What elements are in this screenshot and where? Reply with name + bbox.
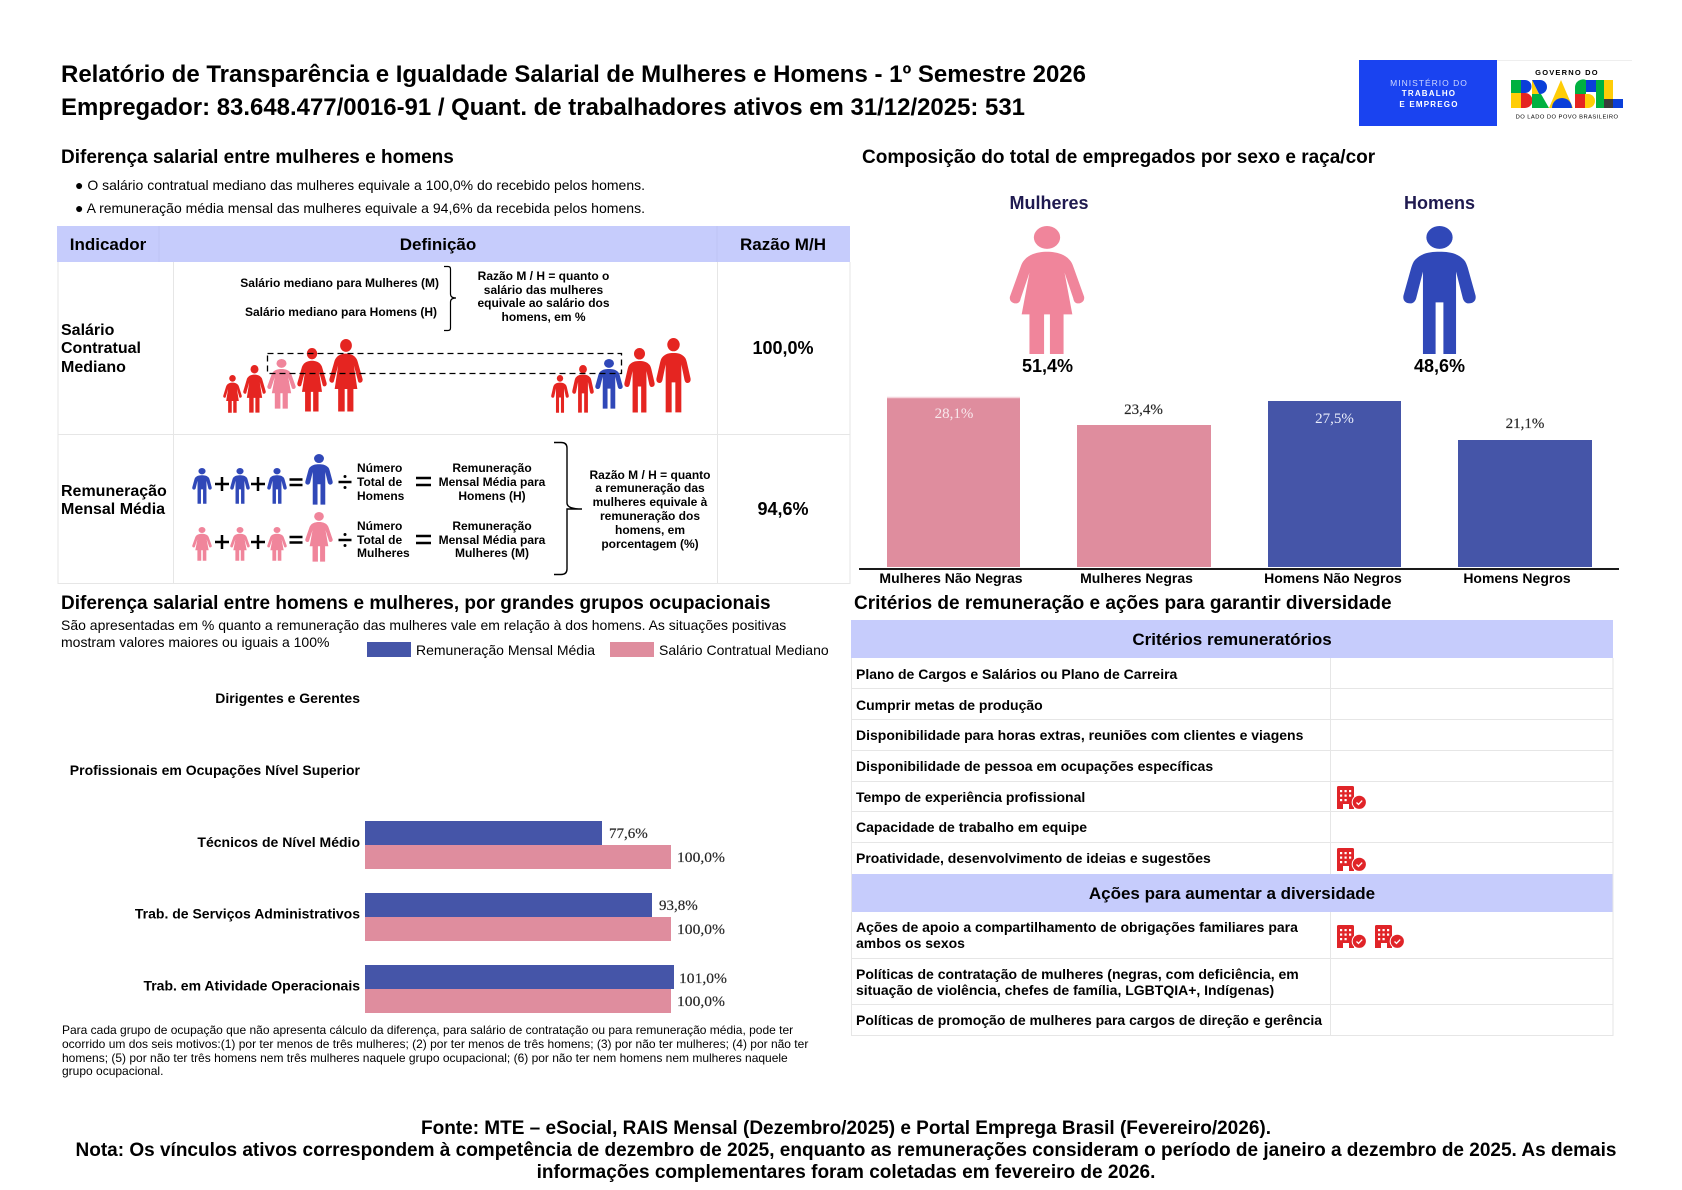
formula: women: Total de	[357, 533, 402, 547]
bar labels: Mulheres Não Negras	[879, 570, 1023, 586]
panel: definition table	[57, 226, 850, 584]
formula: women: Remuneração	[452, 519, 532, 533]
formula: women	[192, 512, 546, 562]
panel: men composition: 48,6%	[1414, 356, 1465, 376]
bar values: 28,1%	[935, 406, 973, 422]
bar values: 93,8%	[659, 898, 698, 914]
actions labels	[856, 919, 1322, 1028]
panel: women composition: 51,4%	[1022, 356, 1073, 376]
footnote: ocorrido um dos seis motivos:(1) por ter menos de três mulheres; (2) por ter menos de três homens; (3) por não ter mulheres; (4) por não ter	[62, 1037, 808, 1051]
formula: women: Mensal Média para	[439, 533, 546, 547]
row label: salário contratual mediano: Contratual	[61, 340, 141, 357]
footnote: homens; (5) por não ter três homens nem três mulheres naquele grupo ocupacional; (6) por não ter nem homens nem mulheres naquele	[62, 1051, 788, 1065]
source note: Nota: Os vínculos ativos correspondem à competência de dezembro de 2025, enquanto as remunerações consideram o período de janeiro a dezembro de 2025. As demais	[76, 1140, 1616, 1161]
heading: composição: Composição do total de empregados por sexo e raça/cor	[862, 147, 1376, 168]
formula: women: Mulheres	[357, 546, 410, 560]
icon: company check, family	[1337, 925, 1367, 949]
panel: men composition	[1403, 193, 1476, 376]
median dashed box	[268, 354, 622, 374]
bar values: 77,6%	[609, 826, 648, 842]
definition: median salary labels: Salário mediano para Mulheres (M)	[240, 276, 439, 290]
category labels: Trab. de Serviços Administrativos	[135, 906, 360, 922]
bar labels	[879, 570, 1571, 586]
subtitle text: mostram valores maiores ou iguais a 100%	[61, 634, 329, 650]
panel: criteria table	[851, 620, 1613, 1036]
definition: median salary labels	[240, 276, 439, 319]
heading: critérios: Critérios de remuneração e ações para garantir diversidade	[854, 593, 1392, 614]
heading: diferença salarial: Diferença salarial entre mulheres e homens	[61, 147, 454, 168]
definition: ratio text row 2: mulheres equivale à	[593, 495, 708, 509]
footnote: grupo ocupacional.	[62, 1064, 163, 1078]
category labels: Profissionais em Ocupações Nível Superior	[70, 762, 361, 778]
definition: ratio text: Razão M / H = quanto o	[478, 269, 609, 283]
logo: Ministério do Trabalho e Emprego: MINISTÉRIO DO	[1390, 78, 1468, 88]
panel: women composition: Mulheres	[1009, 193, 1089, 213]
icon: large brace	[554, 442, 582, 574]
title	[61, 61, 1086, 121]
footnote: Para cada grupo de ocupação que não apresenta cálculo da diferença, para salário de contratação ou para remuneração média, pode ter	[62, 1023, 793, 1037]
definition: ratio text: homens, em %	[501, 310, 586, 324]
icon: row of women	[223, 339, 363, 413]
formula: women: Número	[357, 519, 402, 533]
row label: salário contratual mediano	[61, 322, 141, 376]
bullet text: ● O salário contratual mediano das mulheres equivale a 100,0% do recebido pelos homens.	[75, 177, 645, 193]
formula: men: Remuneração	[452, 461, 532, 475]
definition: ratio text row 2: homens, em	[615, 523, 685, 537]
actions labels: situação de violência, chefes de família, LGBTQIA+, Indígenas)	[856, 982, 1274, 998]
row label: remuneração mensal média: Remuneração	[61, 483, 167, 500]
legend	[367, 642, 829, 658]
bar labels: Homens Não Negros	[1264, 570, 1402, 586]
definition: ratio text row 2: porcentagem (%)	[601, 537, 699, 551]
icon: company check, family second	[1375, 925, 1405, 949]
criteria labels	[856, 666, 1304, 866]
criteria labels: Tempo de experiência profissional	[856, 789, 1085, 805]
bullet text: ● A remuneração média mensal das mulheres equivale a 94,6% da recebida pelos homens.	[75, 200, 645, 216]
legend: Remuneração Mensal Média	[416, 642, 595, 658]
definition: ratio text row 2	[589, 468, 711, 551]
table header labels: Razão M/H	[740, 235, 826, 254]
actions labels: Políticas de promoção de mulheres para cargos de direção e gerência	[856, 1012, 1322, 1028]
formula: men: Total de	[357, 475, 402, 489]
subtitle text: São apresentadas em % quanto a remuneração das mulheres vale em relação à dos homens. As situações positivas	[61, 617, 786, 633]
definition: ratio text: salário das mulheres	[484, 283, 604, 297]
title: Relatório de Transparência e Igualdade Salarial de Mulheres e Homens - 1º Semestre 2026	[61, 61, 1086, 88]
bar chart: occupational groups	[70, 690, 727, 1013]
subtitle text	[61, 617, 786, 650]
criteria labels: Cumprir metas de produção	[856, 697, 1043, 713]
section header: ações: Ações para aumentar a diversidade	[1089, 884, 1375, 903]
formula: men	[192, 454, 546, 505]
bar labels: Homens Negros	[1463, 570, 1571, 586]
logo: Ministério do Trabalho e Emprego: E EMPREGO	[1399, 100, 1459, 109]
source note	[76, 1118, 1616, 1183]
panel: women composition	[1009, 193, 1089, 376]
criteria labels: Disponibilidade para horas extras, reuniões com clientes e viagens	[856, 727, 1304, 743]
bar values: 21,1%	[1506, 416, 1544, 432]
formula: men: Mensal Média para	[439, 475, 546, 489]
icon: company check, proactivity	[1337, 848, 1367, 872]
definition: ratio text row 2: a remuneração das	[595, 481, 705, 495]
title: Empregador: 83.648.477/0016-91 / Quant. de trabalhadores ativos em 31/12/2025: 531	[61, 94, 1025, 121]
bar values	[935, 402, 1544, 432]
heading: grupos ocupacionais: Diferença salarial entre homens e mulheres, por grandes grupos ocupacionais	[61, 593, 771, 614]
bar chart: sexo e raça	[859, 397, 1619, 586]
definition: ratio text row 2: remuneração dos	[600, 509, 700, 523]
icon: row of men	[551, 338, 691, 413]
definition: ratio text	[477, 269, 610, 324]
bar values: 100,0%	[677, 922, 725, 938]
footnote	[62, 1023, 808, 1078]
panel: men composition: Homens	[1404, 193, 1475, 213]
definition: ratio text: equivale ao salário dos	[477, 296, 610, 310]
table header labels: Indicador	[70, 235, 147, 254]
formula: women: Mulheres (M)	[455, 546, 529, 560]
value: 100,0%: 100,0%	[752, 338, 814, 358]
legend: Salário Contratual Mediano	[659, 642, 829, 658]
table header labels	[70, 235, 826, 254]
category labels: Trab. em Atividade Operacionais	[143, 978, 360, 994]
formula: men: Homens (H)	[458, 489, 526, 503]
source note: Fonte: MTE – eSocial, RAIS Mensal (Dezembro/2025) e Portal Emprega Brasil (Fevereiro/2026).	[421, 1118, 1271, 1139]
row label: remuneração mensal média: Mensal Média	[61, 501, 165, 518]
bar values: 100,0%	[677, 994, 725, 1010]
definition: ratio text row 2: Razão M / H = quanto	[589, 468, 711, 482]
criteria labels: Proatividade, desenvolvimento de ideias e sugestões	[856, 850, 1211, 866]
bar values: 27,5%	[1315, 411, 1354, 427]
source note: informações complementares foram coletadas em fevereiro de 2026.	[537, 1162, 1155, 1183]
logo: Governo do Brasil: DO LADO DO POVO BRASILEIRO	[1516, 114, 1618, 120]
actions labels: ambos os sexos	[856, 935, 965, 951]
category labels: Técnicos de Nível Médio	[197, 834, 360, 850]
section header: critérios remuneratórios: Critérios remuneratórios	[1132, 630, 1332, 649]
row label: salário contratual mediano: Salário	[61, 322, 115, 339]
bar values	[609, 826, 727, 1010]
criteria labels: Capacidade de trabalho em equipe	[856, 819, 1087, 835]
criteria labels: Disponibilidade de pessoa em ocupações específicas	[856, 758, 1213, 774]
definition: median salary labels: Salário mediano para Homens (H)	[245, 305, 437, 319]
bar values: 101,0%	[679, 971, 727, 987]
icon: brace	[444, 266, 456, 330]
logo: Governo do Brasil: GOVERNO DO	[1535, 68, 1599, 77]
logo: Ministério do Trabalho e Emprego: TRABALHO	[1402, 89, 1456, 98]
actions labels: Ações de apoio a compartilhamento de obrigações familiares para	[856, 919, 1298, 935]
category labels: Dirigentes e Gerentes	[215, 690, 360, 706]
table header labels: Definição	[400, 235, 476, 254]
icon: company check, experience	[1337, 786, 1367, 810]
value: 94,6%: 94,6%	[757, 499, 809, 519]
bullet text	[75, 177, 645, 216]
formula: men: Homens	[357, 489, 405, 503]
bar values: 100,0%	[677, 850, 725, 866]
bar values: 23,4%	[1124, 402, 1163, 418]
logo: Governo do Brasil	[1497, 60, 1632, 126]
logo: Ministério do Trabalho e Emprego	[1359, 60, 1497, 126]
row label: salário contratual mediano: Mediano	[61, 359, 126, 376]
formula: men: Número	[357, 461, 402, 475]
bar labels: Mulheres Negras	[1080, 570, 1193, 586]
actions labels: Políticas de contratação de mulheres (negras, com deficiência, em	[856, 966, 1299, 982]
criteria labels: Plano de Cargos e Salários ou Plano de Carreira	[856, 666, 1178, 682]
category labels	[70, 690, 361, 994]
row label: remuneração mensal média	[61, 483, 167, 518]
